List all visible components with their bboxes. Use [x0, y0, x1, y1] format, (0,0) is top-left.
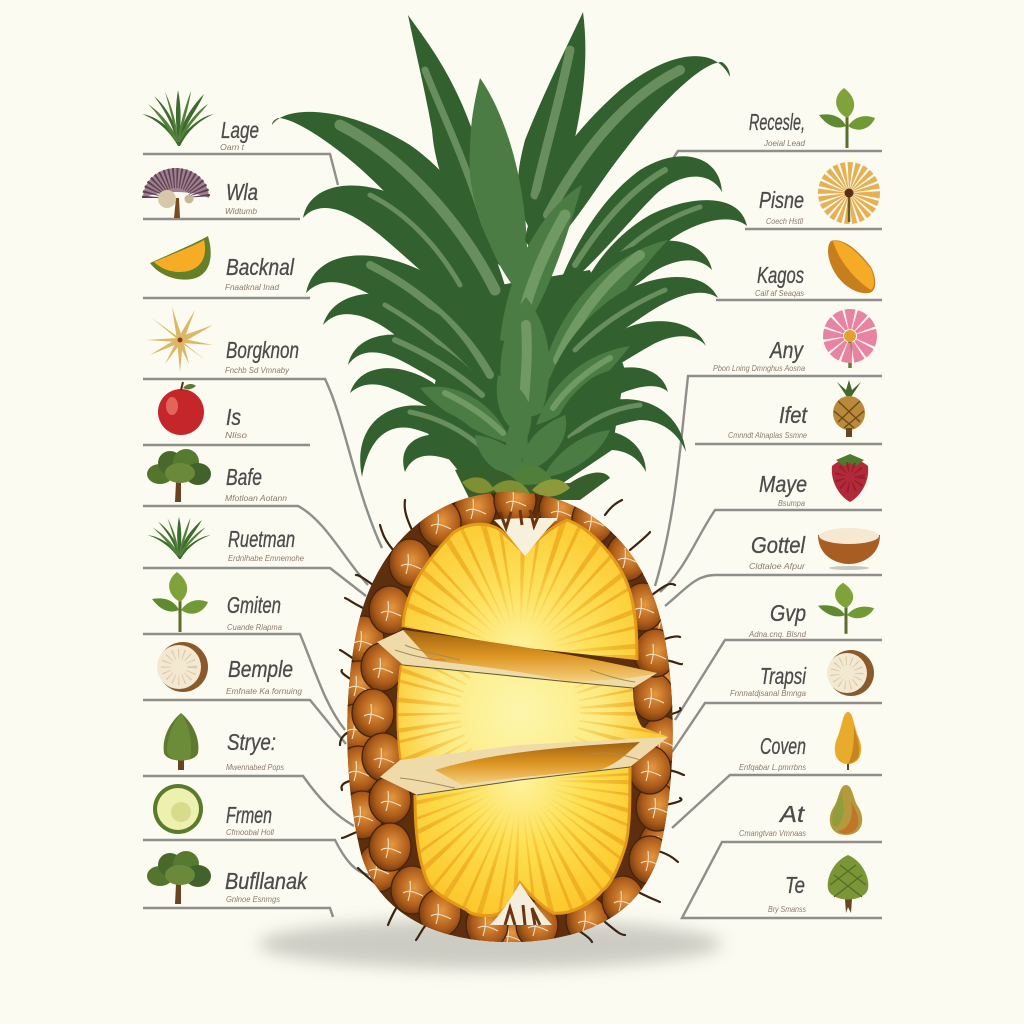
label group: Maye: Maye	[759, 471, 807, 497]
label group: Borgknon: Fnchb Sd Vmnaby	[225, 365, 290, 375]
label group: Borgknon	[146, 307, 299, 375]
label group: Pisne: Coech Hstll	[766, 216, 804, 226]
pineapple crown	[272, 12, 747, 500]
label group: Gottel: Gottel	[751, 532, 806, 558]
icon: green melon slice	[153, 784, 203, 834]
label group: Wla: Wldtumb	[225, 206, 257, 216]
label group: Gvp: Adna.cnq. Blsnd	[748, 629, 806, 639]
icon: spiky grass	[147, 517, 211, 559]
icon: bowl	[818, 528, 880, 570]
icon: sprig	[152, 572, 208, 632]
label group: Is: Nliso	[225, 430, 247, 440]
label group: At	[739, 785, 862, 838]
label group: Wla	[143, 168, 258, 218]
icon: coconut slice	[827, 650, 874, 696]
pineapple fruit	[335, 476, 686, 959]
icon: yellow pear	[835, 712, 861, 770]
label group: Gottel	[749, 528, 880, 571]
label group: Te	[768, 855, 868, 914]
label group: Bemple: Emfnate Ka fornuing	[226, 686, 302, 696]
label group: Trapsi	[730, 650, 874, 698]
label group: Lage: Lage	[221, 117, 259, 143]
label group: Bufllanak: Bufllanak	[225, 868, 308, 894]
label group: Gmiten: Cuande Rlapma	[227, 622, 282, 632]
label group: Wla: Wla	[226, 179, 258, 205]
flesh top section	[403, 522, 636, 660]
label group: Frmen	[153, 784, 275, 837]
flesh bottom outline	[415, 767, 630, 916]
label group: Strye	[164, 713, 285, 772]
icon: sprig	[818, 583, 874, 634]
right leader lines	[655, 151, 882, 918]
label group: Recesle: Joeial Lead	[763, 138, 805, 148]
icon: star burst	[146, 307, 213, 372]
rind	[347, 492, 673, 942]
label group: Ifet: Ifet	[779, 402, 808, 428]
icon: tree	[147, 449, 211, 502]
icon: coconut slice	[157, 642, 208, 692]
label group: Recesle: Recesle,	[749, 109, 805, 135]
icon: green cone fruit	[828, 855, 868, 913]
label group: Maye: Bsumpa	[778, 498, 805, 508]
label group: Backnal: Backnal	[226, 254, 295, 280]
label group: Ruetman: Erdnlhabe Emnemohe	[228, 553, 304, 563]
label group: Coven: Enfqabar L.pmrrbns	[739, 762, 807, 772]
label group: Bafe	[147, 449, 287, 503]
label group: Trapsi: Trapsi	[760, 663, 807, 689]
label group: Ruetman	[147, 517, 304, 563]
icon: tree	[147, 851, 211, 904]
flesh bottom section	[415, 768, 628, 914]
label group: Gvp: Gvp	[770, 600, 806, 626]
icon: yellow burst	[832, 176, 866, 222]
label group: Ruetman: Ruetman	[228, 526, 295, 552]
label group: Backnal: Fnaatknal Inad	[225, 282, 279, 292]
icon: cone tree	[164, 713, 198, 770]
flesh top outline	[403, 520, 637, 660]
label group: Trapsi: Fnnnatdjsanal Bmnga	[730, 688, 806, 698]
label group: Ifet: Cmnndt Alnaplas Ssmne	[728, 430, 807, 440]
icon: red apple	[158, 382, 204, 435]
label group: Bemple: Bemple	[228, 656, 293, 682]
label group: Recesle	[749, 88, 875, 148]
left leader lines	[143, 154, 382, 917]
icon: mini pineapple	[833, 380, 865, 437]
label group: Is: Is	[226, 404, 241, 430]
label group: Gvp	[748, 583, 874, 639]
label group: Strye: Strye:	[227, 729, 276, 755]
icon: raspberry	[832, 454, 868, 502]
label group: Any: Pbon Lning Dmnghus Aosna	[713, 363, 805, 373]
label group: Bafe: Bafe	[226, 464, 262, 490]
core bottom	[490, 883, 552, 925]
label group: Lage: Oarn t	[220, 142, 245, 152]
label group: Bafe: Mfotloan Aotann	[225, 493, 287, 503]
label group: Bufllanak: Gnlnoe Esnmgs	[226, 894, 281, 904]
label group: Bufllanak	[147, 851, 308, 904]
label group: Any	[713, 319, 867, 373]
ground shadow	[258, 919, 722, 969]
icon: sprig	[819, 88, 875, 148]
icon: orange wedge	[150, 236, 211, 280]
label group: Any: Any	[768, 337, 804, 363]
label group: Gmiten	[152, 572, 282, 632]
icon: spiky grass	[142, 90, 214, 146]
label group: Maye	[759, 454, 868, 508]
label group: Is	[158, 382, 247, 440]
rind spikes	[340, 500, 684, 942]
icon: green pear	[830, 785, 862, 835]
label group: Backnal	[150, 236, 295, 292]
label group: Kagos: Caif af Seaqas	[755, 288, 805, 298]
label group: At: Cmangtvan Vmnaas	[739, 828, 807, 838]
core top	[494, 510, 558, 556]
label group: Pisne: Pisne	[759, 187, 804, 213]
upper cut slat	[377, 630, 657, 688]
label group: Te: Bry Smanss	[768, 904, 807, 914]
label group: Coven: Coven	[760, 733, 806, 759]
label group: At: At	[778, 801, 806, 827]
icon: dome palm	[143, 168, 209, 218]
label group: Bemple	[157, 642, 302, 696]
label group: Pisne	[759, 176, 866, 226]
lower cut slat	[380, 737, 668, 795]
label group: Te: Te	[785, 872, 805, 898]
label group: Borgknon: Borgknon	[226, 337, 299, 363]
icon: orange slice	[828, 240, 875, 293]
label group: Kagos: Kagos	[757, 262, 804, 288]
label group: Gmiten: Gmiten	[227, 592, 281, 618]
label group: Coven	[739, 712, 861, 772]
flesh middle section	[396, 665, 668, 760]
label group: Frmen: Frmen	[226, 802, 272, 828]
icon: pink flower	[833, 319, 867, 368]
label group: Lage	[142, 90, 259, 152]
label group: Kagos	[755, 240, 875, 298]
label group: Strye: Mwennabed Pops	[226, 762, 285, 772]
label group: Gottel: Cldtaloe Afpur	[749, 561, 806, 571]
label group: Frmen: Cfmoobal Holl	[226, 827, 275, 837]
label group: Ifet	[728, 380, 865, 440]
